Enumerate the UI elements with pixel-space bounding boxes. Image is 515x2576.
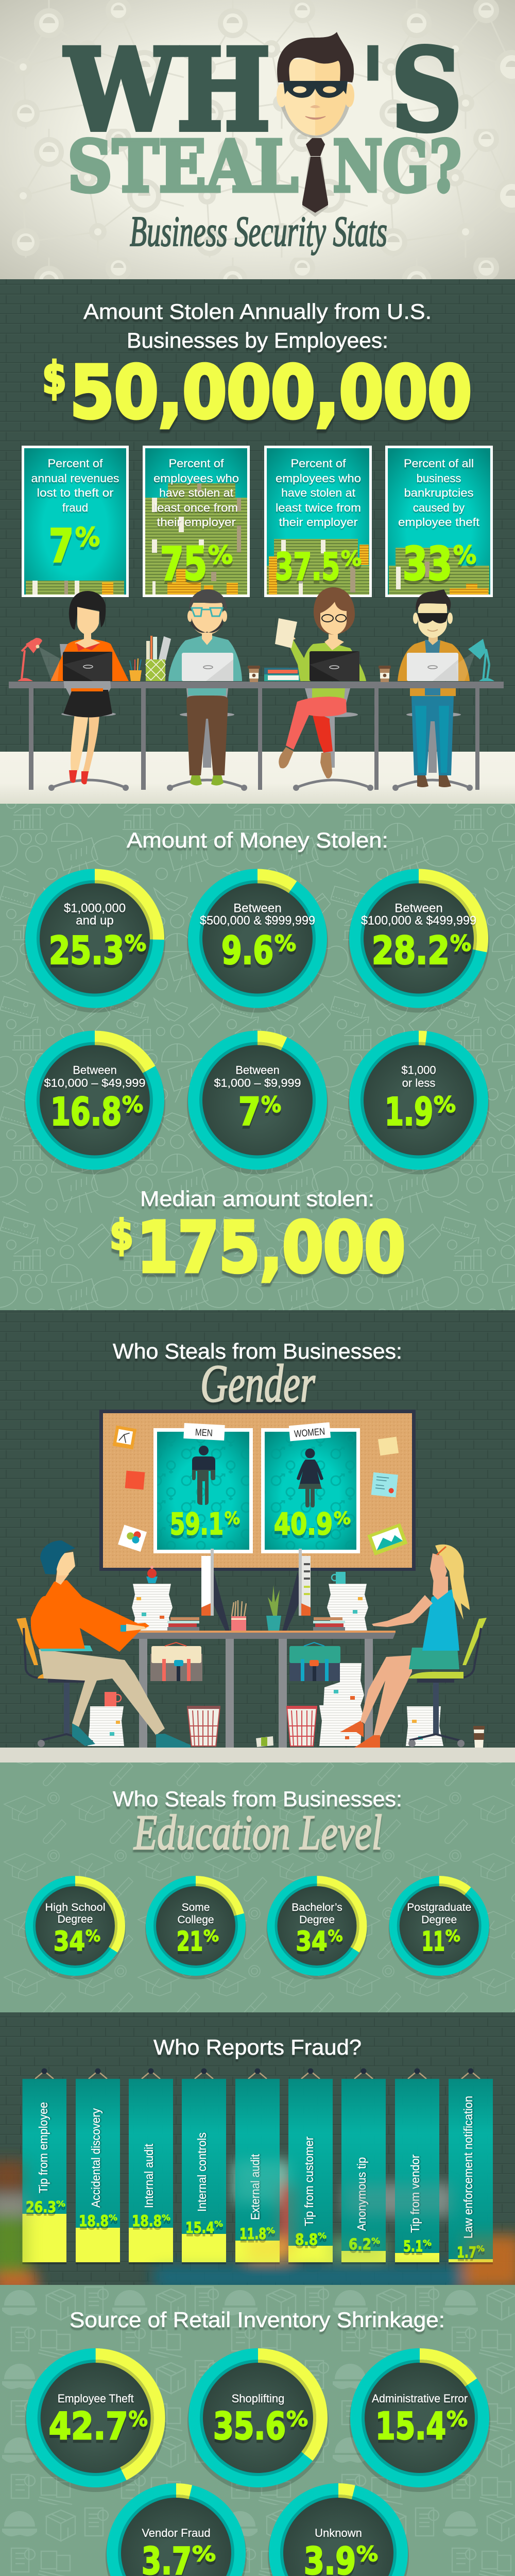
title: WHO'S: ' (363, 25, 383, 156)
banner: law enforcement notification (449, 2079, 493, 2264)
donut: 16.8%: % (122, 1092, 143, 1117)
donut: high school 34%: % (85, 1927, 100, 1945)
person: masked man in amber jacket (392, 589, 473, 791)
banner: tip from customer: Tip from customer (302, 2137, 316, 2226)
donut: 7%: % (261, 1092, 281, 1117)
poster: 37.5%: least twice from (276, 501, 361, 514)
poster: 37.5%: their employer (279, 516, 357, 529)
donut: bachelor's 34%: % (328, 1927, 343, 1945)
poster: women: 40.9 (274, 1506, 333, 1541)
icon: man (192, 1446, 215, 1505)
heading: Source of Retail Inventory Shrinkage: (70, 2308, 445, 2332)
banner: internal audit: Internal audit (142, 2143, 156, 2208)
donut: postgraduate 11% (389, 1876, 490, 1979)
icon: red lamp (18, 638, 60, 681)
donut: unknown 3.9% (268, 2483, 409, 2576)
poster: 33%: employee theft (398, 516, 479, 529)
person: man with teal glasses (167, 589, 247, 791)
donut: 7%: 7 (238, 1090, 261, 1134)
big number: $175,000: $ (110, 1211, 133, 1259)
person: blonde woman (340, 1545, 487, 1748)
donut: some college 21%: Some (182, 1902, 210, 1913)
note: red square (125, 1470, 145, 1490)
corkboard (99, 1410, 416, 1571)
donut: vendor fraud 3.7% (106, 2483, 247, 2576)
poster: men (153, 1423, 253, 1553)
poster: 75%: have stolen at (159, 486, 233, 499)
title: WHO'S: S (391, 25, 462, 156)
donut: postgraduate 11%: Postgraduate (407, 1902, 471, 1913)
person: man in orange sweater (16, 1540, 191, 1748)
banner: law enforcement notification: 1.7 (457, 2244, 476, 2261)
desk (9, 682, 504, 790)
banner: tip from employee: % (56, 2199, 65, 2209)
donut: bachelor's 34%: 34 (296, 1926, 328, 1957)
banner: internal controls: Internal controls (195, 2132, 209, 2212)
donut: 1.9% (348, 1030, 489, 1175)
poster: 37.5%: 37.5 (275, 545, 340, 588)
poster: 75% (143, 446, 250, 597)
poster: 37.5%: Percent of (290, 457, 346, 470)
poster: 7%: annual revenues (31, 472, 119, 485)
banner: anonymous tip: Anonymous tip (355, 2157, 368, 2231)
donut: some college 21% (145, 1876, 246, 1979)
heading: Amount of Money Stolen: (127, 828, 388, 852)
donut: 9.6%: % (274, 930, 296, 956)
big number: $50,000,000: 50,000,000 (70, 351, 472, 435)
icon: books (167, 1617, 345, 1631)
donut: 16.8%: $10,000 – $49,999 (44, 1077, 145, 1089)
donut: some college 21%: 21 (177, 1926, 203, 1957)
donut: high school 34%: 34 (54, 1926, 85, 1957)
poster: 37.5%: have stolen at (281, 486, 355, 499)
donut: 16.8%: Between (73, 1063, 117, 1077)
poster: 75%: 75 (160, 537, 207, 590)
donut: 1.9%: % (434, 1092, 456, 1117)
label: women (289, 1422, 331, 1441)
donut: shoplifting 35.6% (187, 2348, 329, 2492)
haze background (0, 2161, 515, 2291)
donut: postgraduate 11%: 11 (422, 1926, 445, 1957)
poster: 33%: caused by (413, 501, 465, 514)
poster: 37.5%: employees who (276, 472, 361, 485)
banner: accidental discovery: Accidental discovery (89, 2108, 102, 2208)
banner: internal controls (182, 2079, 226, 2264)
heading (83, 299, 432, 352)
title: STEALING?: STEAL (67, 125, 298, 208)
banner: tip from vendor: 5.1 (403, 2238, 423, 2255)
donut: postgraduate 11%: % (445, 1927, 460, 1945)
banner: external audit: 11.8 (239, 2225, 266, 2243)
donut: shoplifting 35.6%: 35.6 (213, 2404, 286, 2448)
donut: high school 34%: Degree (58, 1913, 93, 1925)
icon: teal lamp (456, 639, 494, 681)
icon: mug on stack (332, 1572, 346, 1584)
poster: 75%: least once from (154, 501, 238, 514)
heading: Who Steals from Businesses: (113, 1339, 402, 1363)
donut: 1.9%: 1.9 (385, 1090, 433, 1134)
donut: bachelor's 34%: Degree (299, 1914, 335, 1926)
donut: 16.8%: 16.8 (50, 1090, 122, 1134)
poster: 33%: 33 (403, 537, 452, 590)
donut: 25.3% (24, 869, 165, 1013)
poster: 75%: Percent of (169, 457, 224, 470)
donut: 25.3%: % (125, 930, 146, 956)
banner: tip from customer: 8.8 (295, 2231, 318, 2248)
icon: coffee cup (248, 666, 260, 682)
poster: 7%: lost to theft or (37, 486, 113, 499)
donut: 7% (187, 1030, 328, 1175)
banner: internal controls: % (214, 2219, 223, 2229)
banner: external audit: % (266, 2226, 275, 2235)
donut: 1.9%: or less (402, 1077, 435, 1089)
banner: external audit: External audit (248, 2154, 262, 2220)
label: men: MEN (195, 1427, 213, 1439)
heading: Who Reports Fraud? (153, 2035, 362, 2059)
poster: men: % (225, 1508, 240, 1528)
icon: masked thief head (277, 32, 354, 138)
donut: some college 21%: % (203, 1927, 219, 1945)
heading: median: Median amount stolen: (140, 1187, 374, 1211)
donut: 28.2%: $100,000 & $499,999 (361, 914, 476, 927)
title: WHO'S (64, 25, 462, 156)
donut: employee theft 42.7%: 42.7 (49, 2404, 128, 2448)
chair (16, 1618, 94, 1747)
label: men (183, 1423, 225, 1440)
poster: 75%: % (208, 541, 233, 570)
panel: education level (0, 1762, 515, 2012)
icon: cream briefcase (150, 1642, 202, 1681)
banner: internal controls: 15.4 (185, 2219, 214, 2236)
donut: high school 34% (25, 1876, 126, 1979)
banner chart (23, 2068, 493, 2264)
note: landscape photo (367, 1523, 407, 1555)
banner: tip from employee: 26.3 (26, 2198, 56, 2216)
chair (408, 1618, 487, 1747)
donut: employee theft 42.7% (25, 2348, 166, 2492)
donut: shoplifting 35.6%: % (286, 2408, 308, 2431)
donut: 25.3%: 25.3 (49, 928, 124, 973)
banner: tip from employee: Tip from employee (37, 2102, 50, 2193)
donut: 9.6%: $500,000 & $999,999 (200, 914, 315, 927)
banner: internal audit: 18.8 (132, 2212, 162, 2230)
icon: can and mug and cup (105, 1692, 485, 1748)
header panel (0, 0, 515, 279)
banner: tip from employee (23, 2079, 66, 2264)
icon: necktie (302, 138, 328, 217)
note: colour wheel (118, 1525, 147, 1552)
donut: some college 21%: College (177, 1914, 214, 1926)
person: woman with glasses holding paper (275, 587, 373, 791)
donut: unknown 3.9%: Unknown (315, 2527, 362, 2539)
poster: 75%: their employer (157, 516, 236, 529)
icon: green briefcase (289, 1642, 340, 1681)
note: orange photo (113, 1426, 136, 1449)
banner: tip from customer: % (318, 2231, 327, 2241)
panel: retail inventory shrinkage (0, 2285, 515, 2576)
banner: internal audit: % (162, 2213, 170, 2223)
icon: plant (266, 1585, 281, 1631)
donut: shoplifting 35.6%: Shoplifting (232, 2392, 284, 2405)
banner: accidental discovery: 18.8 (79, 2212, 109, 2230)
donut: bachelor's 34% (267, 1876, 368, 1979)
banner: tip from vendor (395, 2079, 439, 2264)
donut: 7%: Between (235, 1063, 280, 1077)
poster: men: 59.1 (170, 1506, 224, 1541)
banner: tip from customer (288, 2079, 333, 2264)
banner: tip from vendor: Tip from vendor (408, 2155, 422, 2233)
donut: employee theft 42.7%: % (129, 2408, 148, 2431)
donut: 25.3%: and up (76, 914, 114, 927)
donut: 16.8% (24, 1030, 165, 1175)
panel: who reports fraud (0, 2012, 515, 2291)
banner: anonymous tip: 6.2 (349, 2235, 371, 2253)
donut: 9.6%: 9.6 (221, 928, 273, 973)
person: woman in orange (48, 591, 129, 791)
poster: 7%: Percent of (47, 457, 103, 470)
icon: monitors (201, 1549, 311, 1631)
haze overlay on banners (0, 2161, 515, 2291)
big number: $175,000: 175,000 (137, 1207, 405, 1288)
subheading: Gender: Gender (200, 1354, 315, 1413)
label: women: WOMEN (294, 1426, 325, 1440)
banner: external audit (235, 2079, 280, 2264)
donut: administrative error 15.4%: % (447, 2408, 468, 2431)
poster: 33%: % (453, 541, 476, 570)
donut: 28.2%: Between (394, 902, 443, 915)
poster: 7% (22, 446, 129, 597)
poster: 7%: 7 (49, 519, 74, 572)
big number: $50,000,000: $ (42, 352, 66, 404)
poster: 33%: Percent of all (404, 457, 474, 470)
donut: administrative error 15.4%: 15.4 (375, 2404, 446, 2448)
poster: 7%: fraud (62, 501, 88, 514)
donut: 28.2%: 28.2 (372, 928, 450, 973)
poster: 37.5% (264, 446, 372, 597)
banner: accidental discovery (76, 2079, 120, 2264)
icon: cupcake (146, 1566, 158, 1583)
donut: 28.2% (348, 869, 489, 1013)
icon: paper stacks on floor (88, 1663, 443, 1746)
donut: 9.6%: Between (233, 902, 282, 915)
desk (116, 1631, 396, 1748)
icon: paper stacks on desk (132, 1584, 368, 1631)
donut: administrative error 15.4%: Administrative Error (372, 2392, 468, 2405)
donut: unknown 3.9%: % (356, 2543, 378, 2566)
banner: accidental discovery: % (109, 2213, 117, 2223)
donut: vendor fraud 3.7%: % (192, 2543, 216, 2566)
title: STEALING? (67, 125, 461, 208)
donut: 1.9%: $1,000 (401, 1063, 436, 1077)
donut: vendor fraud 3.7%: Vendor Fraud (142, 2527, 211, 2539)
donut: 9.6% (187, 869, 328, 1013)
note: yellow sticky (378, 1437, 399, 1455)
icon: pencil jar (231, 1600, 246, 1631)
icon: coffee cup (379, 666, 391, 682)
donut: 25.3%: $1,000,000 (64, 902, 126, 915)
donut: administrative error 15.4% (349, 2348, 490, 2492)
banner: law enforcement notification: % (476, 2244, 485, 2253)
subheading: Education Level: Education Level (133, 1805, 382, 1860)
poster: 33%: bankruptcies (404, 486, 474, 499)
panel: amount of money stolen (0, 804, 515, 1310)
poster: 75%: employees who (153, 472, 239, 485)
banner: law enforcement notification: Law enforcement notification (461, 2096, 475, 2239)
donut: bachelor's 34%: Bachelor’s (291, 1902, 342, 1913)
donut: high school 34%: High School (45, 1902, 105, 1913)
poster: 33%: business (417, 472, 461, 485)
poster: women (261, 1422, 360, 1553)
icon: book stack (264, 668, 300, 681)
icon: woman (297, 1449, 323, 1507)
icon: desk items (pencils, books, lattice box) (129, 636, 171, 681)
icon: wastebaskets (187, 1706, 317, 1746)
heading: Businesses by Employees: (127, 328, 388, 352)
title: WHO'S: WH (64, 25, 270, 156)
note: blue card (371, 1472, 398, 1497)
banner hangers (35, 2071, 480, 2079)
banner: internal audit (129, 2079, 173, 2264)
poster: women: % (334, 1508, 351, 1528)
donut: postgraduate 11%: Degree (421, 1914, 457, 1926)
panel: amount stolen annually (0, 279, 515, 804)
title: STEALING?: NG? (333, 125, 461, 208)
poster: 37.5%: % (341, 547, 362, 571)
heading: Who Steals from Businesses: (113, 1787, 402, 1811)
donut: 7%: $1,000 – $9,999 (214, 1077, 301, 1089)
poster: 7%: % (75, 522, 100, 552)
panel: gender (0, 1310, 515, 1762)
banner: anonymous tip: % (371, 2236, 380, 2246)
poster: 33% (385, 446, 493, 597)
heading: Amount Stolen Annually from U.S. (83, 299, 432, 324)
banner: tip from vendor: % (423, 2238, 432, 2248)
donut: 28.2%: % (450, 930, 471, 956)
donut: employee theft 42.7%: Employee Theft (58, 2392, 134, 2405)
banner: anonymous tip (341, 2079, 386, 2264)
